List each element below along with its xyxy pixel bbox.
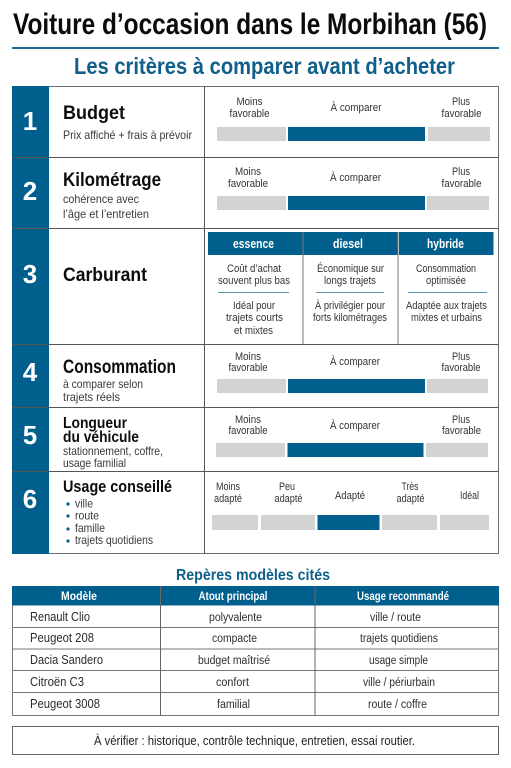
row 2: kilométrage: Kilométrage xyxy=(63,170,161,191)
table: modèles xyxy=(12,586,499,716)
row 2: kilométrage: Moins xyxy=(235,166,261,178)
row 4: consommation: favorable xyxy=(228,362,268,374)
row: Citroën C3: Citroën C3 xyxy=(30,675,84,689)
row 5: longueur du véhicule: favorable xyxy=(228,425,268,437)
row 3: carburant: Carburant xyxy=(63,265,148,286)
subtitle: Les critères à comparer avant d’acheter xyxy=(74,53,455,79)
row 5: longueur du véhicule: usage familial xyxy=(63,456,126,470)
row 1: budget: À comparer xyxy=(330,101,382,114)
row: Dacia Sandero: Dacia Sandero xyxy=(30,653,103,667)
hybride details xyxy=(406,263,487,324)
essence details: et mixtes xyxy=(234,325,273,337)
row: Peugeot 208 xyxy=(30,631,438,645)
usage list: route xyxy=(75,508,99,522)
row 1: budget: Moins xyxy=(236,96,263,108)
row 1: budget xyxy=(23,96,490,142)
row: Peugeot 208: compacte xyxy=(212,633,257,645)
table header: Atout principal xyxy=(198,589,268,603)
row 5: longueur du véhicule: stationnement, coffre, xyxy=(63,444,163,458)
row 3: carburant: 3 xyxy=(23,259,37,289)
essence details: Idéal pour xyxy=(233,300,275,312)
row 4: consommation: à comparer selon xyxy=(63,377,143,391)
fuel header: diesel xyxy=(304,232,398,255)
row 5: longueur du véhicule xyxy=(23,414,488,470)
table header: Usage recommandé xyxy=(357,589,449,603)
callout: à vérifier xyxy=(12,726,498,754)
row: Renault Clio: Renault Clio xyxy=(30,610,90,624)
row 4: consommation: Plus xyxy=(452,351,470,363)
diesel details: À privilégier pour xyxy=(315,299,385,312)
essence details xyxy=(218,263,290,337)
row 1: budget: Prix affiché + frais à prévoir xyxy=(63,128,192,142)
row 6: usage conseillé xyxy=(23,477,489,547)
table header xyxy=(12,586,499,606)
fuel header: essence: essence xyxy=(233,237,274,251)
row 6: usage conseillé: adapté xyxy=(214,493,242,505)
row 5: longueur du véhicule: Moins xyxy=(235,414,261,426)
hybride details: Adaptée aux trajets xyxy=(406,300,487,312)
row: Citroën C3: ville / périurbain xyxy=(363,677,435,689)
row 4: consommation: Consommation xyxy=(63,357,176,378)
fuel header: hybride: hybride xyxy=(427,237,464,251)
row 5: longueur du véhicule: du véhicule xyxy=(63,429,139,446)
row: Peugeot 208: Peugeot 208 xyxy=(30,631,94,645)
row: Renault Clio: ville / route xyxy=(370,612,421,624)
row 5: longueur du véhicule: favorable xyxy=(442,425,481,437)
row 2: kilométrage xyxy=(23,166,489,221)
title rule xyxy=(12,47,499,49)
row 1: budget: 1 xyxy=(23,106,37,136)
row 6: usage conseillé: Adapté xyxy=(335,490,365,502)
fuel header: diesel: diesel xyxy=(333,237,363,251)
row 2: kilométrage: favorable xyxy=(442,178,482,190)
row 4: consommation xyxy=(23,351,488,404)
row: Peugeot 208: trajets quotidiens xyxy=(360,633,438,645)
diesel details: longs trajets xyxy=(324,275,376,287)
row 4: consommation: trajets réels xyxy=(63,390,120,404)
diesel details xyxy=(313,262,387,324)
diesel details: Économique sur xyxy=(317,262,384,275)
row: Peugeot 3008: route / coffre xyxy=(368,699,427,711)
row: Dacia Sandero: usage simple xyxy=(369,655,428,667)
row 6: usage conseillé: adapté xyxy=(274,493,302,505)
row: Dacia Sandero xyxy=(30,653,428,667)
row: Citroën C3: confort xyxy=(216,677,250,689)
row 2: kilométrage: favorable xyxy=(228,178,268,190)
usage list: ville xyxy=(75,496,93,510)
row 6: usage conseillé: Très xyxy=(402,481,419,493)
essence details: trajets courts xyxy=(226,312,283,324)
row 6: usage conseillé: adapté xyxy=(396,493,424,505)
row 6: usage conseillé: Peu xyxy=(279,481,295,493)
hybride details: optimisée xyxy=(426,275,466,287)
row 4: consommation: À comparer xyxy=(330,355,380,368)
row: Citroën C3 xyxy=(30,675,435,689)
row 5: longueur du véhicule: Plus xyxy=(452,414,470,426)
row 1: budget: favorable xyxy=(442,108,482,120)
row 4: consommation: 4 xyxy=(23,357,38,387)
row 2: kilométrage: cohérence avec xyxy=(63,192,139,206)
row 1: budget: Budget xyxy=(63,103,126,124)
row 2: kilométrage: Plus xyxy=(452,166,470,178)
heading: repères modèles cités: Repères modèles cités xyxy=(176,567,330,584)
row: Peugeot 3008: Peugeot 3008 xyxy=(30,697,100,711)
row 1: budget: favorable xyxy=(230,108,270,120)
row 6: usage conseillé: Idéal xyxy=(460,490,479,502)
row 1: budget: Plus xyxy=(452,96,470,108)
diesel details: forts kilométrages xyxy=(313,312,387,324)
table header: Modèle xyxy=(61,589,97,603)
row 3: carburant xyxy=(23,232,494,344)
row 5: longueur du véhicule: Longueur xyxy=(63,415,127,432)
hybride details: mixtes et urbains xyxy=(411,312,482,324)
usage list: trajets quotidiens xyxy=(75,533,153,547)
row 2: kilométrage: 2 xyxy=(23,176,37,206)
row 2: kilométrage: À comparer xyxy=(330,171,381,184)
usage list: famille xyxy=(75,521,105,535)
panel: criteria table xyxy=(12,86,499,554)
row: Renault Clio: polyvalente xyxy=(209,612,262,624)
fuel header: essence xyxy=(208,232,302,255)
row: Dacia Sandero: budget maîtrisé xyxy=(198,655,270,667)
row 6: usage conseillé: 6 xyxy=(23,484,37,514)
row 6: usage conseillé: Moins xyxy=(216,481,240,493)
row: Peugeot 3008 xyxy=(30,697,427,711)
row 6: usage conseillé: Usage conseillé xyxy=(63,477,172,496)
row 4: consommation: favorable xyxy=(442,362,480,374)
row: Peugeot 3008: familial xyxy=(217,699,250,711)
row 2: kilométrage: l’âge et l’entretien xyxy=(63,207,149,221)
essence details: Coût d’achat xyxy=(227,263,281,275)
row: Renault Clio xyxy=(30,610,421,624)
row 5: longueur du véhicule: 5 xyxy=(23,420,37,450)
row 4: consommation: Moins xyxy=(235,351,261,363)
callout: à vérifier: À vérifier : historique, contrôle technique, entretien, essai routier. xyxy=(94,733,415,748)
fuel header: hybride xyxy=(399,232,494,255)
row 5: longueur du véhicule: À comparer xyxy=(330,419,380,432)
hybride details: Consommation xyxy=(416,263,476,275)
usage list xyxy=(66,496,153,547)
essence details: souvent plus bas xyxy=(218,275,290,287)
